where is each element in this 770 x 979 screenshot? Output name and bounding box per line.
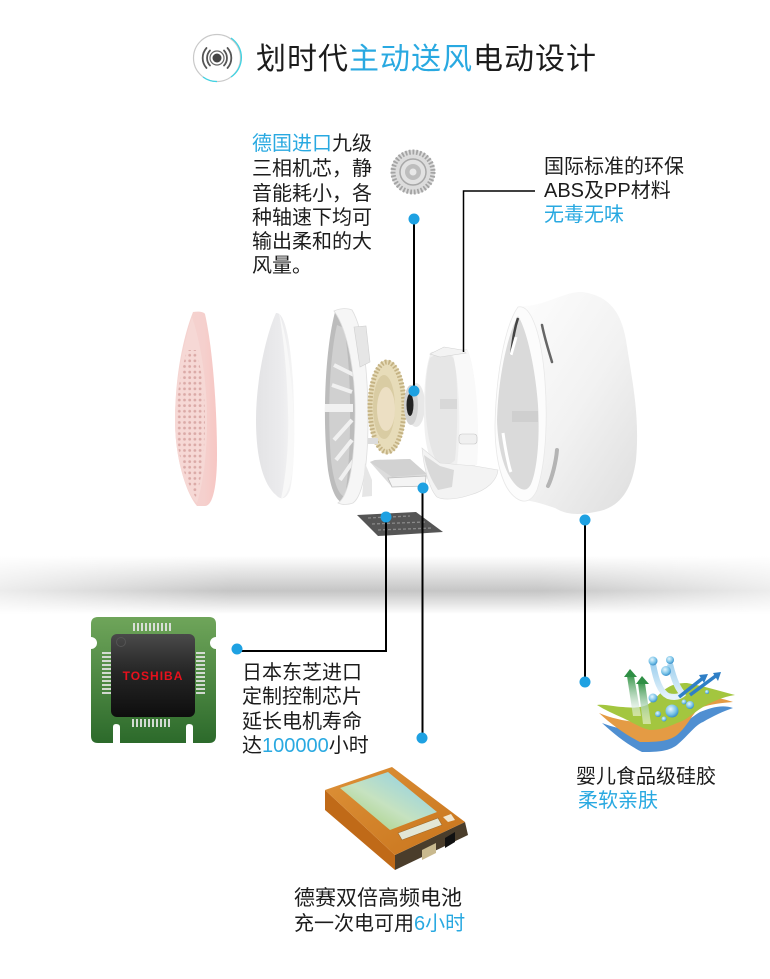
icon: Toshiba chip [91, 617, 216, 743]
text block: control chip: 延长电机寿命 [242, 710, 362, 733]
part: pink outer cover [175, 312, 217, 506]
text block: motor description: 三相机芯，静 [252, 157, 372, 180]
part: circuit board [357, 512, 443, 536]
text block: battery: 德赛双倍高频电池 [294, 887, 462, 910]
text block: ABS material: 国际标准的环保 [544, 155, 684, 178]
leader line: battery [416, 482, 428, 744]
icon: Toshiba chip: TOSHIBA [123, 669, 183, 683]
leader line: ABS material [464, 191, 535, 352]
text block: control chip [242, 661, 369, 757]
part: battery cell [370, 459, 427, 487]
leader line: control chip [232, 512, 392, 654]
icon: orange battery pack [325, 767, 468, 870]
icon: layered fabric [597, 656, 735, 752]
part: white filter pad [256, 313, 294, 499]
text block: silicone: 婴儿食品级硅胶 [576, 765, 716, 788]
text block: silicone: 柔软亲肤 [578, 789, 658, 812]
text block: battery: 充一次电可用6小时 [294, 912, 465, 935]
text block: motor description: 德国进口九级 [252, 132, 372, 155]
text block: ABS material: 无毒无味 [544, 203, 624, 226]
leader line: silicone [580, 514, 590, 688]
text block: ABS material [544, 155, 684, 226]
part: silicone face seal [495, 292, 637, 514]
text block: motor description: 风量。 [252, 255, 312, 277]
part: middle frame [424, 347, 478, 470]
text block: battery [294, 887, 465, 935]
icon: motor fan [391, 150, 435, 194]
part: motor [404, 383, 425, 427]
text block: motor description [252, 132, 372, 277]
floor shadow band [0, 556, 770, 614]
icon: sound waves badge [194, 34, 241, 82]
text block: motor description: 种轴速下均可 [252, 206, 372, 229]
title: 划时代主动送风电动设计 [256, 43, 597, 76]
part: lower battery cover [422, 448, 498, 499]
text block: control chip: 达100000小时 [242, 734, 369, 757]
part: fan housing shell [325, 309, 372, 504]
text block: control chip: 定制控制芯片 [242, 685, 362, 708]
text block: ABS material: ABS及PP材料 [544, 179, 671, 202]
text block: control chip: 日本东芝进口 [242, 661, 362, 684]
text block: silicone [576, 765, 716, 812]
text block: motor description: 输出柔和的大 [252, 230, 372, 253]
text block: motor description: 音能耗小，各 [252, 182, 372, 205]
leader line: motor [408, 214, 420, 396]
part: beige impeller [368, 360, 406, 454]
